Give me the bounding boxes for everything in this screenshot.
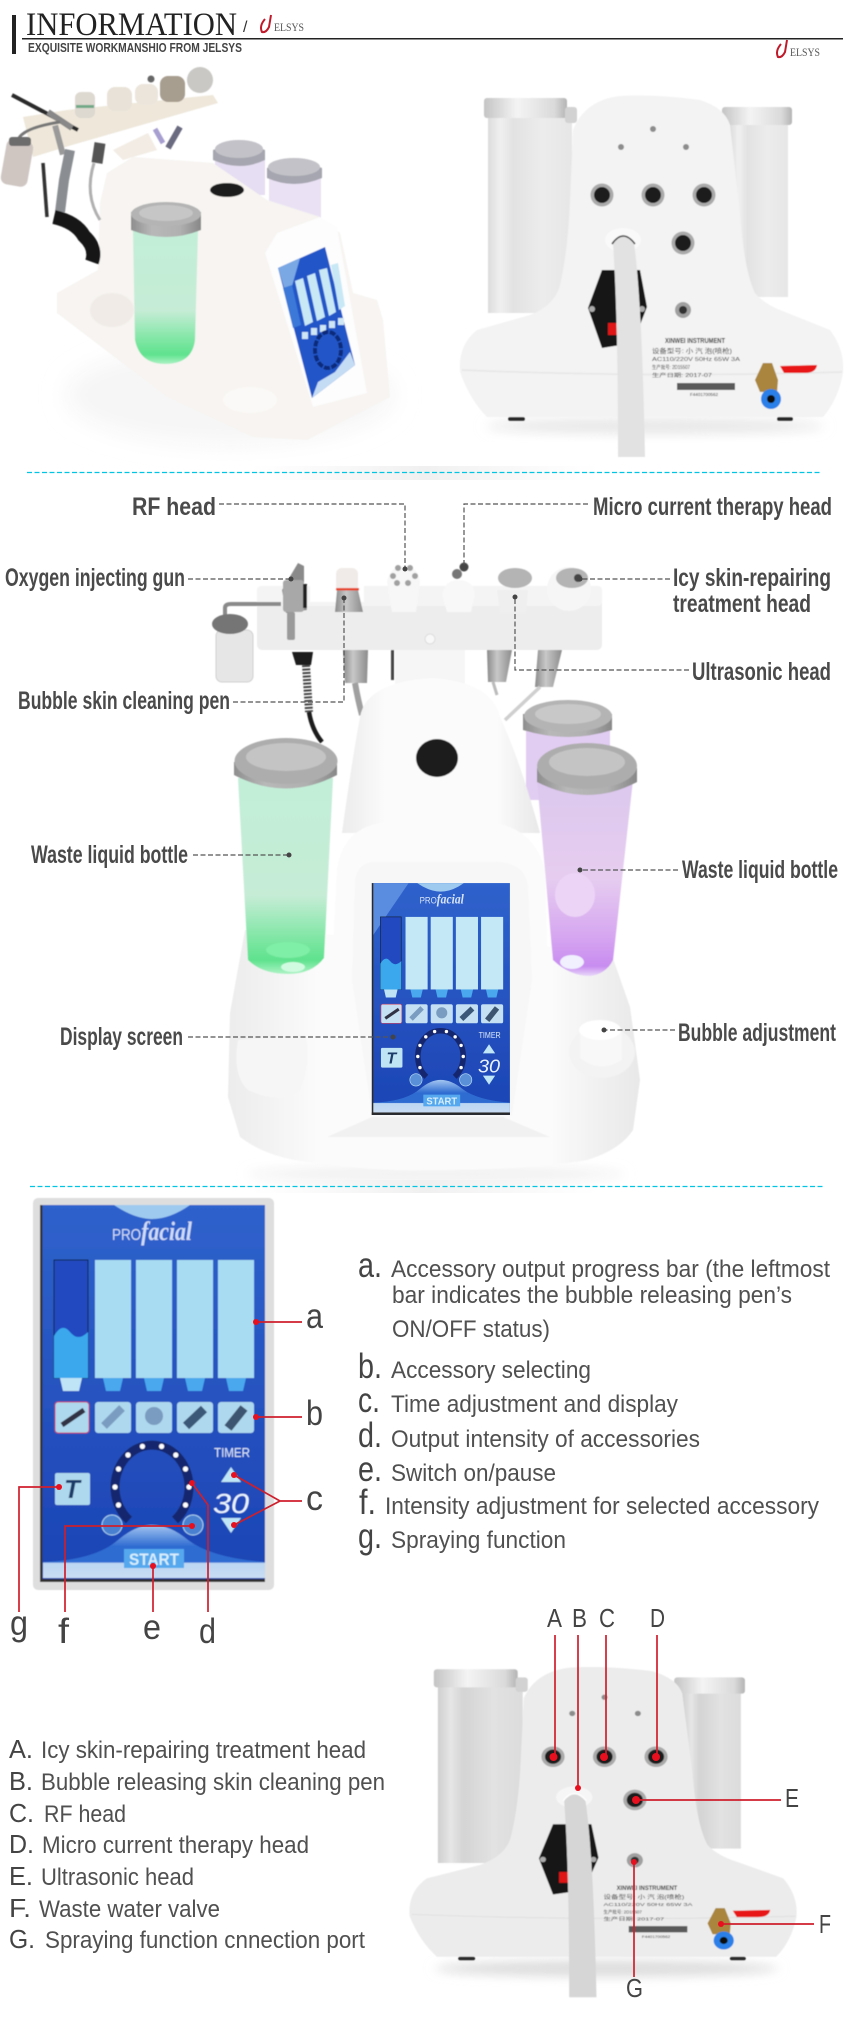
black button [210,183,244,197]
callout B [572,1603,587,1791]
rating label [652,336,741,397]
rating label: 生产日期: 2017-07 [652,372,712,379]
callout e [143,1563,161,1647]
item D: D. [9,1829,34,1859]
item E: E. [9,1861,33,1891]
timer [213,1445,250,1533]
valve [708,1908,770,1950]
callout f: f [58,1612,69,1651]
bottles [434,1669,745,1863]
back bottles [213,140,322,222]
item F: Waste water valve [39,1896,220,1923]
item B: B. [9,1766,33,1796]
item F: F. [9,1893,31,1923]
top notch [114,1205,190,1219]
leader: Bubble skin cleaning pen [18,596,346,715]
callout E [632,1783,799,1813]
green bottle [131,202,201,364]
air gun and jar [0,95,78,188]
legend: uppercase A-G [9,1734,385,1954]
front view screen: TIMER [479,1031,501,1040]
leader: Display screen: Display screen [60,1023,183,1051]
handle bar [257,586,602,650]
rating label: XINWEI INSTRUMENT [665,336,725,345]
item f [359,1483,820,1522]
subtitle: EXQUISITE WORKMANSHIO FROM JELSYS [28,40,242,55]
pens and cords [43,127,180,262]
callout g [10,1484,62,1643]
arc lights [112,1444,192,1508]
front view screen: PROfacial [420,891,464,906]
item d [358,1416,700,1455]
divider band [250,466,600,480]
front arch panel [323,823,553,1150]
callout D [650,1603,665,1761]
item D: Micro current therapy head [42,1832,309,1859]
start button: START [129,1550,180,1569]
treatment heads [335,562,591,613]
angled screen [278,247,355,398]
item E: Ultrasonic head [41,1864,194,1891]
tray recesses [90,293,277,413]
label: 生产日期: 2017-07 [604,1916,665,1923]
logo: Jelsys header: ELSYS [274,20,304,34]
callout F [718,1909,831,1939]
label: F4401700562 [642,1934,671,1939]
callout e: e [143,1608,161,1647]
label: AC110/220V 50Hz 65W 3A [604,1902,694,1908]
callout C [599,1603,615,1761]
callout a: a [306,1297,323,1336]
product photo: rear view annotated [409,1667,797,1997]
rear hose [605,228,645,457]
tower [342,678,540,833]
item d: Output intensity of accessories [391,1426,700,1453]
brand: PROfacial [112,1217,193,1246]
label: XINWEI INSTRUMENT [617,1884,678,1892]
front view screen [372,883,510,1115]
intensity arc [115,1445,189,1520]
item e [358,1450,556,1489]
connectors [541,1746,668,1868]
callout F: F [819,1909,831,1939]
leader: Bubble skin cleaning pen: Bubble skin cleaning pen [18,687,230,715]
hose [556,1786,596,1997]
header rule [22,38,843,40]
leader: RF head: RF head [132,493,216,521]
spray button [55,1473,90,1505]
item c: Time adjustment and display [391,1391,679,1418]
dashed divider [27,472,821,474]
item a: a. [358,1246,382,1285]
item G: G. [9,1924,35,1954]
feet [458,1957,746,1960]
item c [358,1381,679,1420]
callout G: G [626,1973,643,2003]
socket [539,1824,598,1895]
item A: A. [9,1734,33,1764]
logo: Jelsys header [261,15,304,34]
lower wave [43,1525,265,1578]
rubber feet [508,417,793,421]
body [409,1667,797,1957]
item d: d. [358,1416,382,1455]
item e: Switch on/pause [391,1460,556,1487]
callout c [231,1472,323,1528]
callout G [626,1859,643,2003]
callout b: b [306,1394,323,1433]
item b: Accessory selecting [391,1357,591,1384]
item f: f. [359,1483,376,1522]
rating label: 生产批号: 2D15507 [652,364,690,371]
item a: Accessory output progress bar (the leftmost [391,1256,830,1283]
timer: TIMER [214,1445,250,1460]
handle bar [23,95,218,157]
base recesses [236,1026,635,1098]
item g: g. [358,1517,382,1556]
item a: ON/OFF status) [392,1316,550,1343]
product photo: angled front view [0,67,395,445]
leader: Icy skin-repairing treatment head [578,564,831,618]
label: 生产批号: 2D15507 [604,1909,642,1915]
rating label: 设备型号: 小 汽 泡(喷枪) [652,346,732,355]
screen background [42,1205,265,1582]
leader: Icy skin-repairing treatment head: treatment head [673,590,811,618]
leader: Waste liquid bottle left: Waste liquid bottle [31,841,188,869]
leader: Waste liquid bottle right [578,856,838,884]
oxygen gun and jar [212,563,307,682]
item G: Spraying function cnnection port [45,1927,365,1954]
item a [358,1246,830,1343]
item c: c. [358,1381,380,1420]
back purple bottle [523,700,612,800]
divider band [250,1180,600,1193]
item a: bar indicates the bubble releasing pen’s [392,1282,792,1309]
logo: Jelsys right: ELSYS [790,45,820,59]
lower bezel [327,1117,550,1137]
product photo: rear view [460,96,843,457]
item B: Bubble releasing skin cleaning pen [41,1769,385,1796]
base [228,930,640,1170]
timer: 30 [213,1488,249,1519]
item E [9,1861,194,1891]
handle neck [395,648,465,684]
label [604,1884,694,1939]
bezel [33,1198,274,1590]
item f: Intensity adjustment for selected accessory [385,1493,820,1520]
header accent bar [12,15,16,54]
item A: Icy skin-repairing treatment head [41,1737,366,1764]
leader: Micro current therapy head [462,493,832,570]
leader: Ultrasonic head [512,594,831,686]
legend: lowercase a-g [358,1246,830,1556]
item g: Spraying function [391,1527,566,1554]
callout c: c [306,1479,323,1518]
power socket [588,270,647,348]
screen frame [265,217,367,407]
item b: b. [358,1347,382,1386]
callout a [253,1297,323,1336]
progress bars [54,1260,254,1391]
label: 设备型号: 小 汽 泡(喷枪) [604,1893,684,1901]
screen recess [352,862,532,1115]
callout d [189,1480,216,1651]
logo: Jelsys right [777,40,820,59]
item C: C. [9,1798,34,1828]
item b [358,1347,591,1386]
connectors [590,184,716,318]
item C: RF head [44,1801,126,1828]
callout A: A [547,1603,563,1633]
callout D: D [650,1603,665,1633]
spray button: T [64,1474,82,1504]
rating label: AC110/220V 50Hz 65W 3A [652,357,741,363]
rear body [460,96,843,417]
leader: Bubble adjustment [602,1019,836,1047]
callout E: E [785,1783,799,1813]
item C [9,1798,126,1828]
rating label: F4401700562 [690,392,718,397]
screws [618,126,689,150]
product photo: front view [212,562,640,1181]
item e: e. [358,1450,382,1489]
front view screen: 30 [478,1055,501,1076]
leader: RF head [132,493,408,572]
knob [579,1020,622,1067]
title: INFORMATION [26,7,237,43]
callout B: B [572,1603,587,1633]
purple bottle [537,743,637,976]
pens under bar [292,650,562,742]
accessory icons [55,1402,254,1433]
green bottle [234,738,338,974]
neck [113,133,157,160]
leader: Display screen [60,1023,396,1051]
screws [569,1695,641,1716]
callout b [253,1394,323,1433]
front view screen: T [386,1050,397,1067]
heads [75,67,213,118]
round button [416,739,458,777]
callout C: C [599,1603,615,1633]
drain valve [755,363,817,409]
callout g: g [10,1604,28,1643]
callout A [547,1603,563,1761]
dashed divider [30,1186,825,1188]
slash: / [243,19,248,36]
rear bottles [484,98,792,313]
callout d: d [199,1612,216,1651]
plus and minus [102,1515,203,1535]
item g [358,1517,566,1556]
leader: Oxygen injecting gun: Oxygen injecting gun [5,564,185,592]
callout f [58,1523,195,1651]
panel: enlarged control screen [33,1198,274,1590]
device body [57,157,390,440]
front view screen: START [426,1096,458,1107]
